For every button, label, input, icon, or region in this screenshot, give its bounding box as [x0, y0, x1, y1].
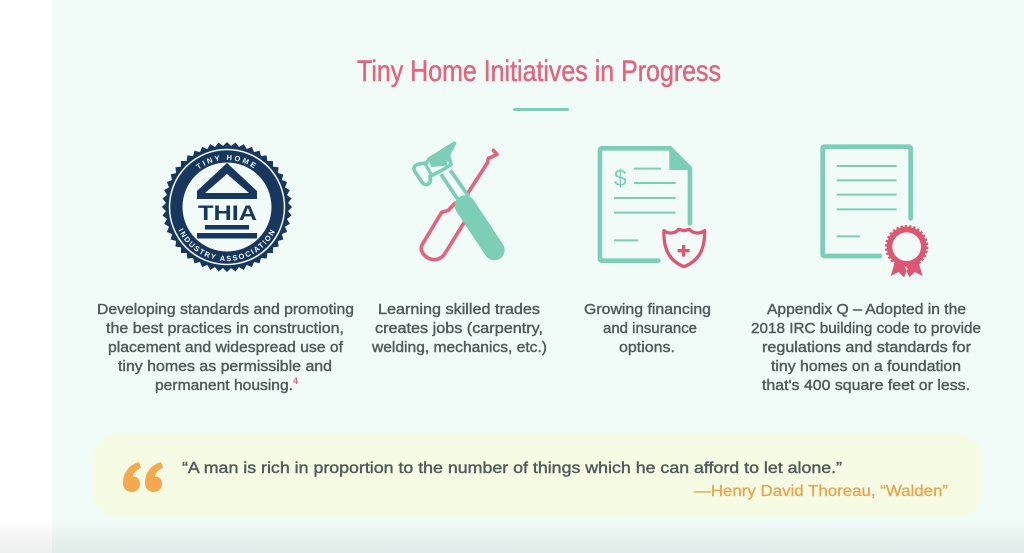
footnote marker: 4 [293, 376, 298, 386]
text: Appendix Q: Appendix Q – Adopted in the [767, 301, 966, 318]
text: THIA description: the best practices in construction, [106, 320, 344, 337]
text: skilled trades: welding, mechanics, etc.) [371, 339, 547, 356]
text: THIA description: tiny homes as permissible and [118, 358, 332, 375]
icon: quotation marks [123, 462, 163, 492]
icon: ribbon seal [886, 226, 927, 277]
bottom shadow [0, 522, 1024, 553]
text: THIA description: Developing standards and promoting [97, 301, 354, 318]
text: skilled trades: Learning skilled trades [378, 301, 540, 318]
text: THIA description: permanent housing. [155, 377, 293, 394]
title: Tiny Home Initiatives in Progress [357, 55, 721, 88]
text: Appendix Q: that's 400 square feet or less. [762, 377, 970, 394]
text: financing: and insurance [603, 320, 697, 337]
icon: THIA seal: INDUSTRY ASSOCIATION [178, 228, 275, 262]
text: THIA description [97, 301, 354, 394]
icon: hammer and screwdriver [414, 143, 497, 260]
callout: Thoreau quote [93, 433, 982, 518]
text: THIA description: placement and widespread use of [108, 339, 344, 356]
text: skilled trades: creates jobs (carpentry, [375, 320, 543, 337]
text: financing: options. [619, 339, 675, 356]
text: financing [584, 301, 711, 356]
text: Appendix Q: tiny homes on a foundation [771, 358, 961, 375]
icon: financial document with shield [600, 148, 705, 267]
text: skilled trades [371, 301, 547, 356]
quote text: “A man is rich in proportion to the number of things which he can afford to let alone.” [182, 460, 842, 477]
quote attribution: —Henry David Thoreau, “Walden” [694, 483, 948, 500]
text: Appendix Q: 2018 IRC building code to provide [751, 320, 981, 337]
text: financing: Growing financing [584, 301, 711, 318]
icon: shield [664, 229, 705, 267]
icon: financial document with shield: $ [614, 165, 627, 191]
title underline [513, 108, 569, 111]
icon: THIA seal: TINY HOME [196, 154, 256, 169]
icon: THIA seal: THIA [198, 202, 257, 225]
icon: certificate with ribbon [823, 147, 927, 277]
text: Appendix Q [751, 301, 981, 394]
icon: THIA seal [162, 142, 292, 272]
text: Appendix Q: regulations and standards for [762, 339, 971, 356]
